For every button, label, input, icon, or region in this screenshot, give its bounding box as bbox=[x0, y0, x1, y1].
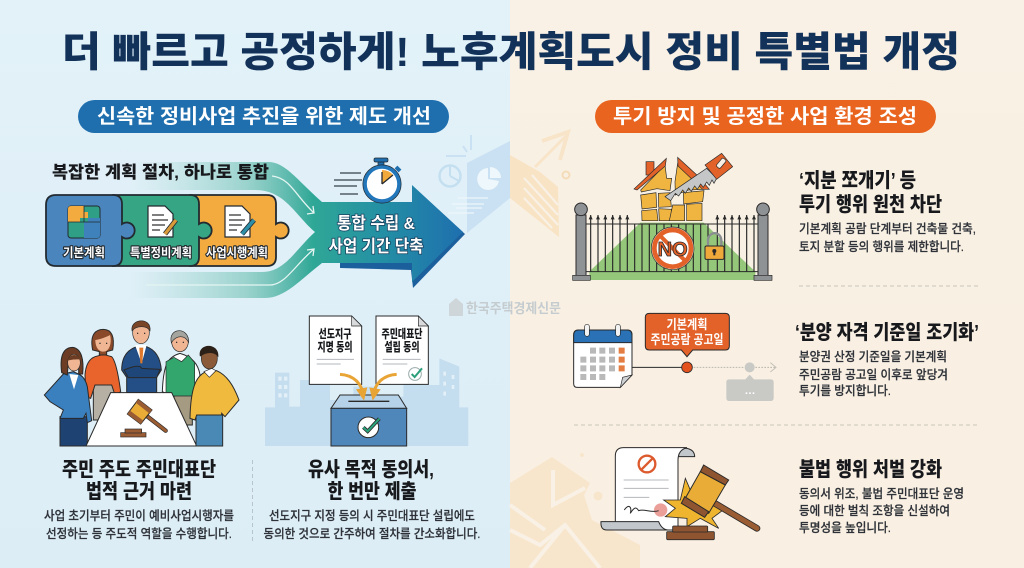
text block: eligibility date: ‘분양 자격 기준일 조기화’ bbox=[795, 321, 979, 344]
text block: share splitting bbox=[799, 169, 976, 254]
title: 더 빠르고 공정하게! 노후계획도시 정비 특별법 개정 bbox=[62, 29, 960, 75]
callout labels: 기본계획 bbox=[666, 317, 708, 332]
timeline bbox=[632, 362, 776, 373]
illustration: residents and table with gavel bbox=[44, 321, 239, 446]
document labels bbox=[318, 326, 422, 354]
padlock bbox=[705, 233, 724, 259]
text block: penalties bbox=[799, 458, 964, 535]
table with gavel bbox=[86, 393, 197, 446]
document labels: 지명 동의 bbox=[318, 339, 352, 354]
integration heading: 복잡한 계획 절차, 하나로 통합 bbox=[52, 163, 269, 182]
person: man in suit bbox=[122, 321, 161, 393]
puzzle piece: green: 특별정비계획 bbox=[130, 246, 192, 260]
text block: penalties: 불법 행위 처벌 강화 bbox=[799, 458, 942, 481]
person: man in yellow sweater bbox=[190, 346, 239, 446]
document bbox=[601, 448, 695, 530]
skyline bbox=[265, 358, 468, 446]
icon: stopwatch bbox=[334, 158, 401, 203]
text block: share splitting: ‘지분 쪼개기’ 등 bbox=[799, 169, 916, 192]
illustration: consent documents into ballot box bbox=[265, 316, 468, 446]
heading pill: left section bbox=[78, 100, 449, 133]
saw bbox=[665, 153, 733, 201]
icon: document with pencil 1 bbox=[148, 206, 176, 237]
main arrow with flow bands bbox=[100, 162, 465, 298]
illustration: document and gavel bbox=[601, 448, 757, 540]
text block: penalties: 등에 대한 벌칙 조항을 신설하여 bbox=[799, 504, 950, 518]
document: committee consent bbox=[376, 316, 428, 384]
illustration: calendar timeline bbox=[574, 313, 776, 401]
puzzle piece: orange: 사업시행계획 bbox=[206, 245, 268, 260]
callout labels: … bbox=[744, 385, 756, 397]
text block: single consent: 선도지구 지정 등의 시 주민대표단 설립에도 bbox=[269, 509, 475, 523]
document: designation consent bbox=[309, 316, 362, 384]
text block: resident leadership: 선정하는 등 주도적 역할을 수행합니다. bbox=[46, 526, 232, 541]
arrows into box bbox=[340, 374, 397, 401]
person: woman in blue jacket bbox=[44, 347, 92, 446]
person: woman in orange bbox=[85, 329, 121, 420]
puzzle piece: blue: 기본계획 bbox=[63, 245, 105, 260]
person: older man in green vest bbox=[162, 331, 200, 425]
text block: resident leadership: 법적 근거 마련 bbox=[86, 480, 192, 503]
puzzle piece: blue bbox=[46, 195, 135, 266]
watermark bbox=[449, 298, 561, 316]
text block: single consent: 동의한 것으로 간주하여 절차를 간소화합니다. bbox=[264, 526, 480, 541]
text block: penalties: 투명성을 높입니다. bbox=[799, 521, 891, 535]
icon: document with pencil 2 bbox=[225, 206, 254, 237]
document labels: 선도지구 bbox=[318, 326, 352, 341]
heading pill: right section: 투기 방지 및 공정한 사업 환경 조성 bbox=[613, 105, 917, 128]
text block: single consent: 한 번만 제출 bbox=[328, 480, 416, 503]
house pieces bbox=[634, 157, 709, 221]
callout labels: 주민공람 공고일 bbox=[650, 332, 724, 347]
text block: penalties: 동의서 위조, 불법 주민대표단 운영 bbox=[799, 487, 964, 501]
heading pill: left section: 신속한 정비사업 추진을 위한 제도 개선 bbox=[97, 105, 431, 128]
panel: plan integration diagram bbox=[46, 158, 465, 298]
text block: resident leadership: 사업 초기부터 주민이 예비사업시행자를 bbox=[44, 508, 234, 523]
gavel with burst bbox=[664, 465, 757, 540]
watermark: 한국주택경제신문 bbox=[466, 301, 561, 316]
illustration: split house behind fence bbox=[573, 153, 772, 280]
text block: resident leadership: 주민 주도 주민대표단 bbox=[62, 458, 216, 481]
text block: share splitting: 투기 행위 원천 차단 bbox=[799, 193, 942, 216]
callout: future placeholder bbox=[726, 375, 774, 401]
NO sign bbox=[651, 227, 694, 270]
heading pill: right section bbox=[595, 100, 936, 133]
puzzle piece: green bbox=[113, 195, 212, 266]
text block: eligibility date: 주민공람 공고일 이후로 앞당겨 bbox=[799, 368, 948, 382]
document labels: 주민대표단 bbox=[382, 327, 422, 341]
NO sign: NO bbox=[658, 239, 688, 261]
document labels: 설립 동의 bbox=[384, 339, 420, 354]
arrow label: 통합 수립 & bbox=[337, 214, 415, 233]
text block: eligibility date bbox=[795, 321, 979, 398]
text block: eligibility date: 분양권 산정 기준일을 기본계획 bbox=[799, 350, 947, 364]
puzzle piece: orange bbox=[190, 195, 289, 266]
hill and fence bbox=[573, 203, 772, 280]
arrow label: 사업 기간 단축 bbox=[328, 237, 424, 256]
calendar bbox=[574, 324, 632, 387]
callout: announcement date bbox=[645, 313, 729, 357]
text block: eligibility date: 투기를 방지합니다. bbox=[799, 383, 891, 398]
callout labels bbox=[650, 317, 756, 397]
text block: single consent bbox=[264, 458, 480, 541]
text block: share splitting: 기본계획 공람 단계부터 건축물 건축, bbox=[799, 222, 976, 236]
text block: single consent: 유사 목적 동의서, bbox=[308, 458, 434, 481]
arrow label bbox=[328, 214, 424, 256]
ballot box bbox=[331, 395, 407, 446]
text block: share splitting: 토지 분할 등의 행위를 제한합니다. bbox=[799, 239, 964, 254]
text block: resident leadership bbox=[44, 458, 234, 541]
